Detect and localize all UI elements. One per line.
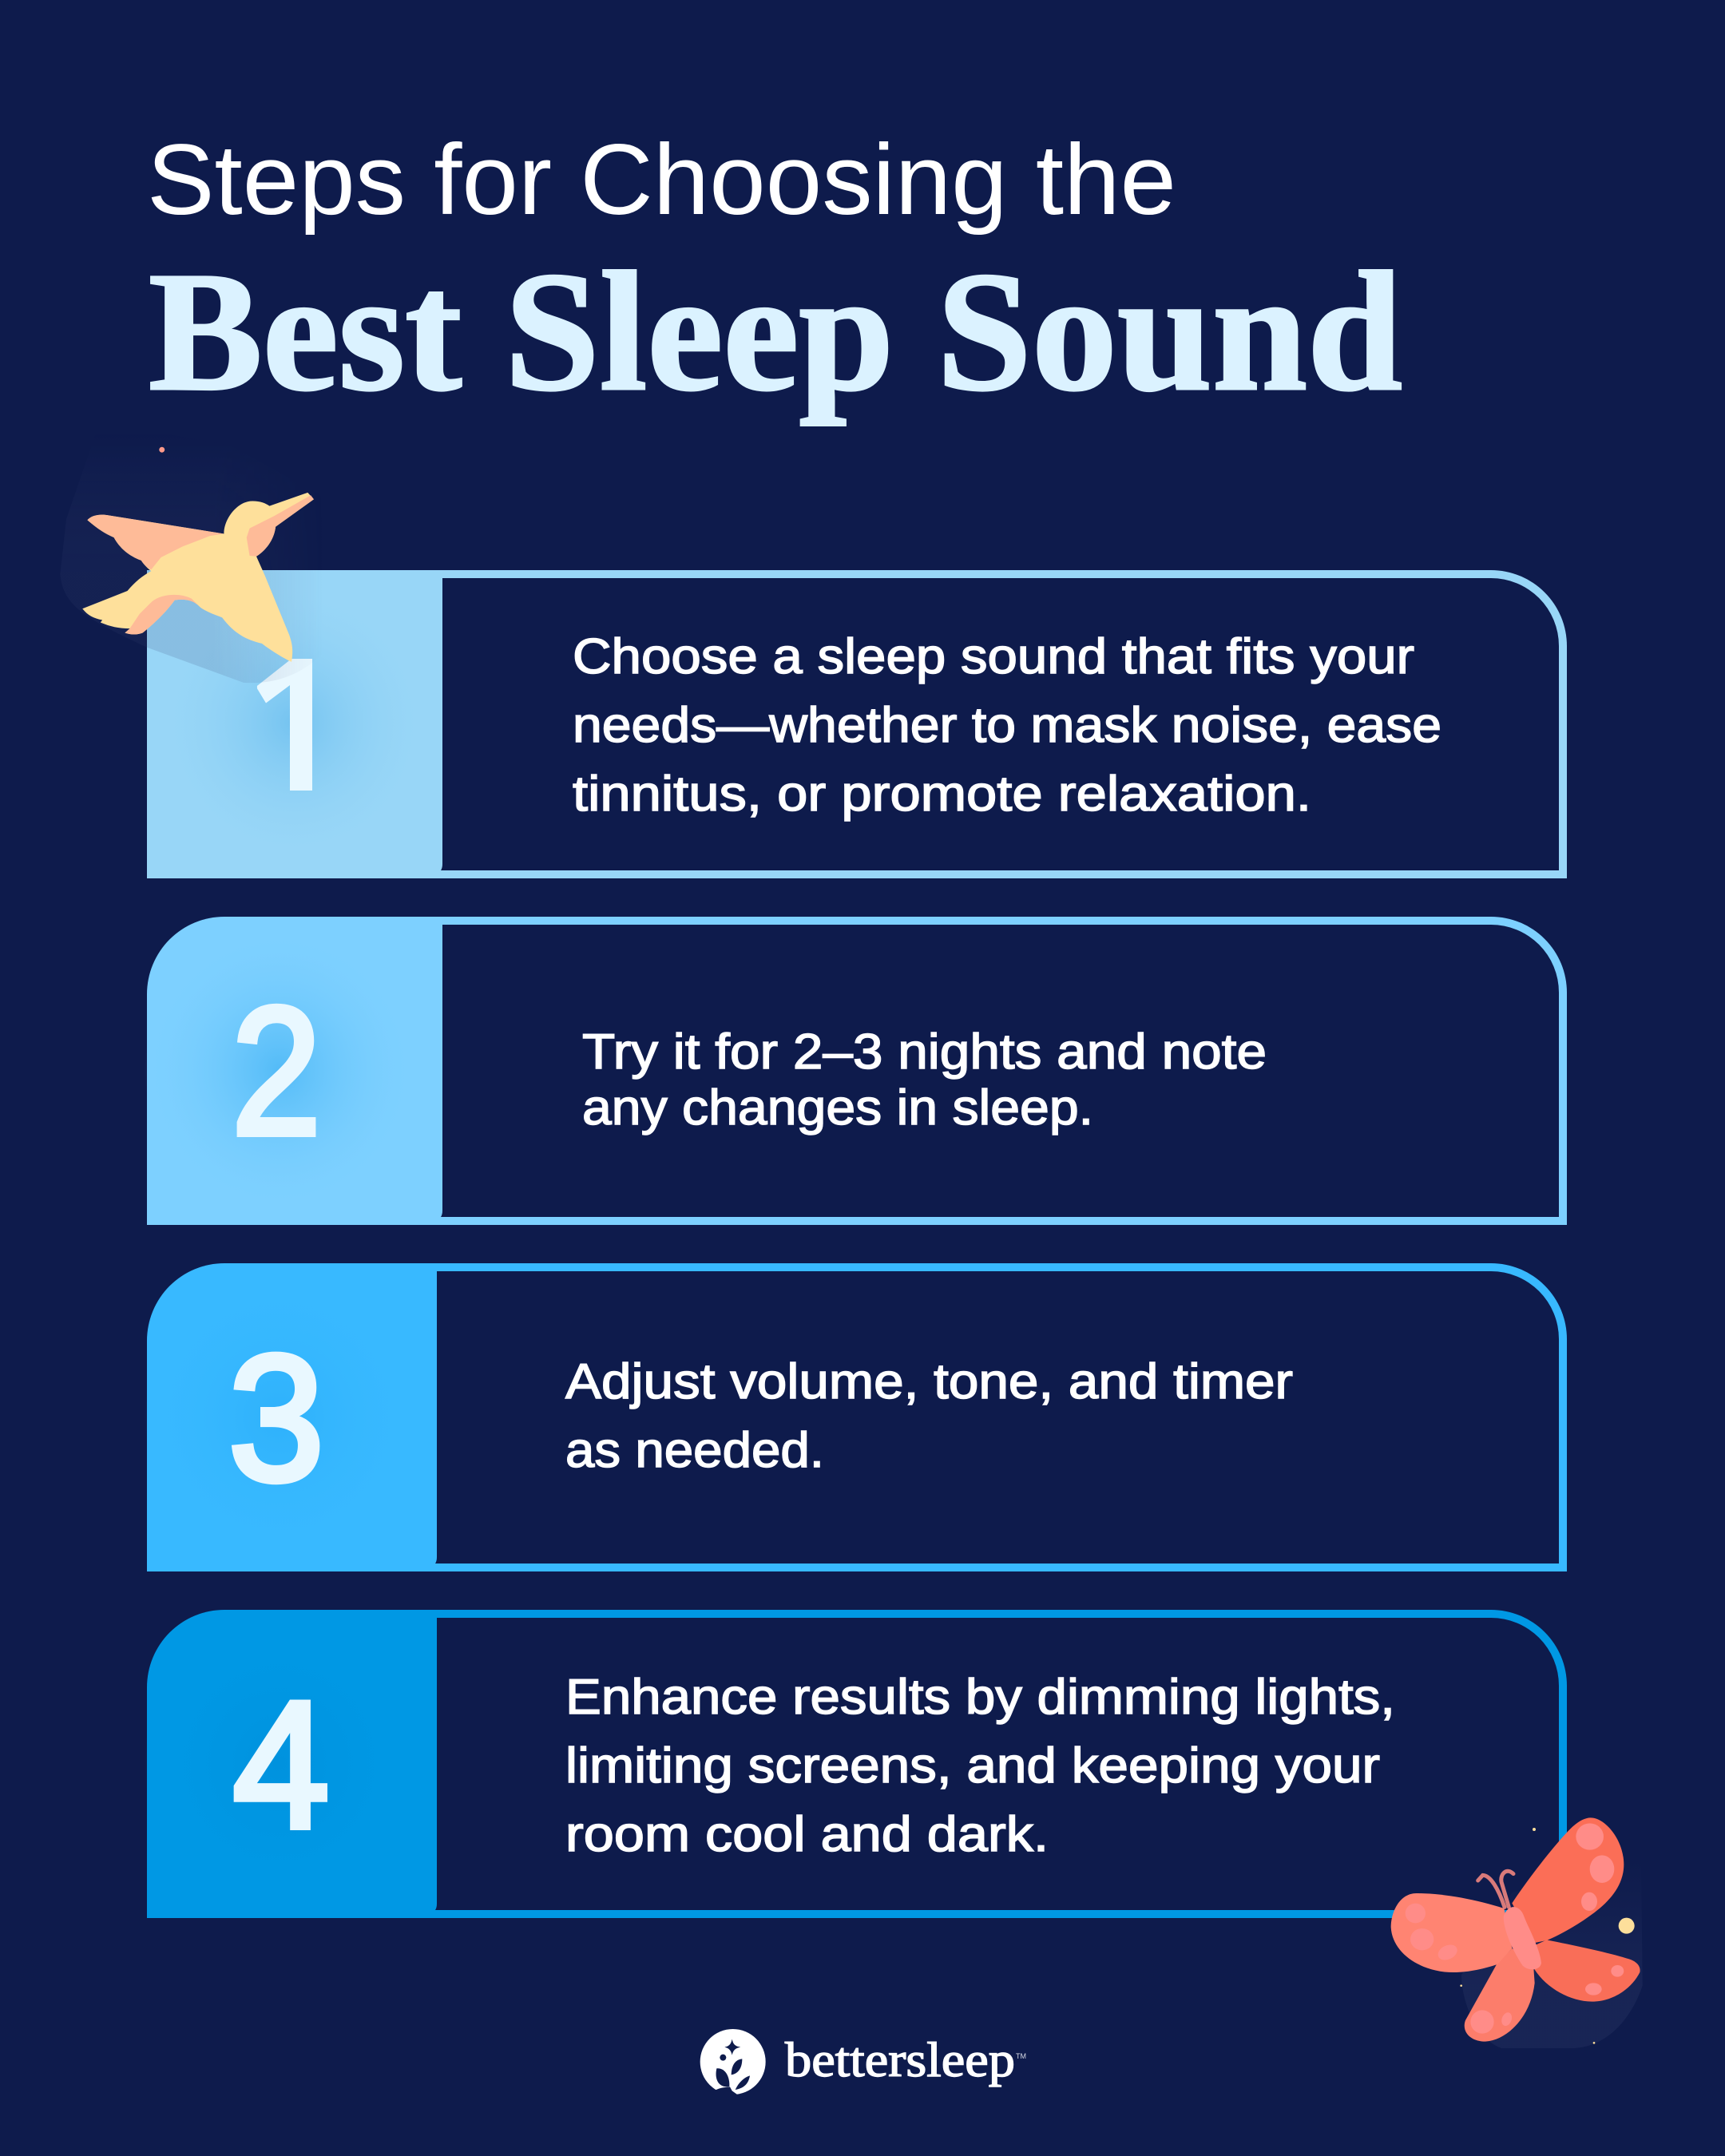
text: step 2: Try it for 2–3 nights and note [582,1024,1267,1080]
bird body [82,493,314,662]
title line 2: Best Sleep Sound [149,237,1402,426]
number glow 3 [144,1277,415,1556]
number 1: 1 [251,627,352,830]
butterfly right upper wing [1512,1817,1624,1943]
butterfly sparkles [1460,1828,1635,2044]
bird lower wing [125,595,199,635]
card interior 1 [441,578,1559,870]
butterfly antennae [1478,1871,1513,1907]
logo wordmark: bettersleep [785,2034,1015,2087]
bird head shading [247,495,314,557]
bird sparkle [159,447,165,453]
text: step 2 [582,1024,1267,1135]
number 3: 3 [228,1318,324,1518]
title line 1: Steps for Choosing the [147,125,1176,236]
butterfly right lower wing [1528,1940,1640,2002]
number 4: 4 [233,1663,329,1865]
card interior 2 [441,925,1559,1217]
logo trademark: TM [1016,2052,1026,2060]
text: step 1: needs—whether to mask noise, ease [573,698,1441,753]
butterfly shadow [1461,1858,1643,2048]
panel: step 4 [144,1610,1567,1918]
title [147,125,1402,426]
text: step 3 [565,1354,1293,1478]
panel: step 2 [144,917,1567,1225]
card outline 3 [147,1263,1567,1571]
text: step 2: any changes in sleep. [582,1080,1093,1135]
panel: step 1 [147,570,1567,878]
text: step 4: limiting screens, and keeping your [565,1738,1380,1793]
text: step 4: Enhance results by dimming lights, [565,1670,1395,1725]
text: step 4 [565,1670,1395,1862]
card outline 2 [147,917,1567,1225]
number glow 2 [144,930,415,1210]
butterfly body [1504,1907,1541,1969]
logo mark [700,2029,766,2097]
bird upper wing [87,515,224,569]
panel: step 3 [144,1263,1567,1571]
logo: bettersleep [700,2029,1026,2097]
card outline 1 [147,570,1567,878]
card interior 3 [435,1271,1559,1563]
icon: butterfly [1391,1817,1643,2048]
card interior 4 [435,1618,1559,1910]
card outline 4 [147,1610,1567,1918]
number glow 1 [158,583,430,862]
number 2: 2 [232,970,321,1173]
text: step 3: Adjust volume, tone, and timer [565,1354,1293,1409]
butterfly left lower wing [1465,1948,1535,2042]
text: step 4: room cool and dark. [565,1807,1049,1862]
text: step 1: Choose a sleep sound that fits your [573,629,1414,684]
icon: hummingbird [82,447,314,683]
butterfly left upper wing [1391,1893,1512,1972]
bird shadow [147,570,295,683]
text: step 1 [573,629,1441,822]
number glow 4 [144,1623,415,1903]
text: step 3: as needed. [565,1423,824,1478]
text: step 1: tinnitus, or promote relaxation. [573,767,1311,822]
butterfly spots [1406,1823,1624,2034]
